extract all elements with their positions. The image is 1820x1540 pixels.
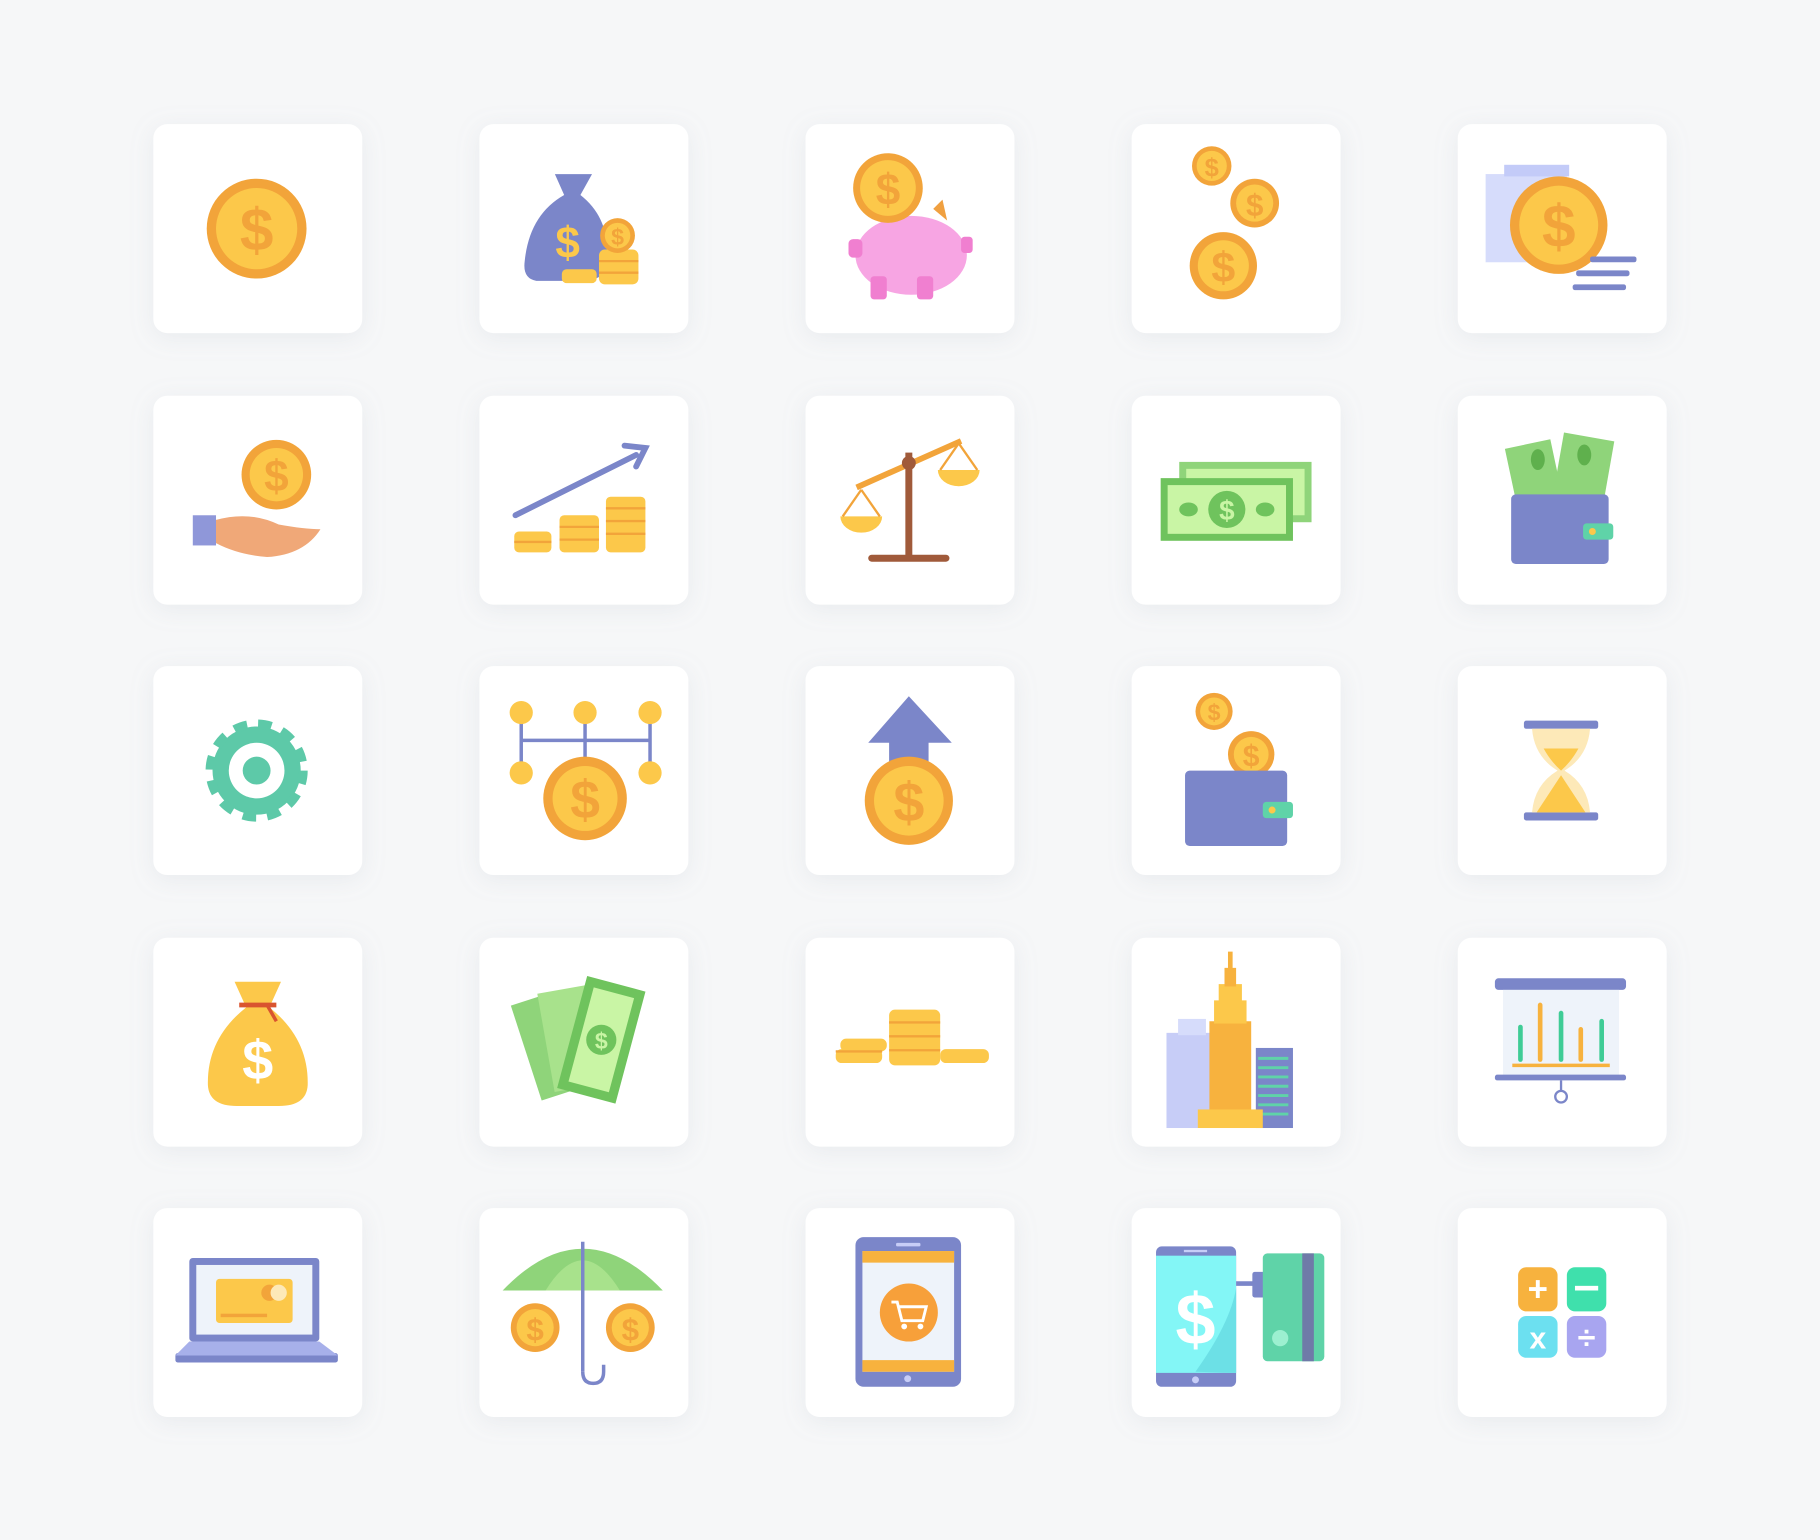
icon: piggy bank	[848, 153, 973, 299]
icon: fanned cash	[511, 976, 645, 1104]
icon: phone payment card	[1156, 1246, 1324, 1387]
icon: hand with coin: $	[264, 452, 289, 501]
icon: phone payment card: $	[1175, 1280, 1215, 1360]
icon: wallet with bills	[1505, 432, 1614, 564]
icon: calculator keys: ÷	[1578, 1320, 1596, 1356]
icon: wallet with coins: $	[1208, 700, 1221, 726]
icon: falling coins: $	[1246, 188, 1263, 223]
icon: coin	[207, 179, 307, 279]
icon: money bag with coins: $	[611, 224, 624, 250]
icon: falling coins: $	[1211, 244, 1235, 292]
icon: document with coin: $	[1542, 192, 1576, 260]
icon: umbrella with coins	[503, 1242, 663, 1383]
icon: money bag with coins: $	[555, 219, 580, 268]
icon: laptop with card	[175, 1258, 338, 1362]
icon: wallet with coins	[1185, 693, 1293, 846]
icon: coin stacks	[836, 1010, 989, 1065]
icon: balance scale	[840, 441, 980, 562]
icon: banknotes	[1161, 462, 1312, 541]
icon: coin network: $	[570, 771, 600, 830]
icon: banknotes: $	[1219, 495, 1235, 526]
icon: money sack: $	[242, 1029, 273, 1091]
icon: coin network	[510, 701, 662, 840]
icon: arrow up coin	[865, 696, 953, 845]
icon: growth chart coins	[514, 446, 645, 552]
icon: falling coins	[1190, 146, 1279, 299]
icon: calculator keys: x	[1529, 1323, 1546, 1356]
icon: hand with coin	[193, 440, 320, 557]
icon: gear	[213, 726, 301, 815]
card grid	[153, 124, 1667, 1417]
icon: calculator keys	[1518, 1267, 1606, 1358]
icon: calculator keys: +	[1528, 1270, 1548, 1309]
icon: money sack	[208, 982, 308, 1106]
icon: document with coin	[1486, 165, 1636, 290]
icon: umbrella with coins: $	[526, 1312, 544, 1347]
icon: wallet with coins: $	[1243, 740, 1260, 773]
icon: piggy bank: $	[876, 165, 900, 214]
icon: falling coins: $	[1205, 154, 1219, 182]
icon: arrow up coin: $	[893, 772, 924, 834]
icon: umbrella with coins: $	[622, 1312, 639, 1347]
icon: tablet shopping	[855, 1237, 961, 1387]
icon: presentation board chart	[1495, 978, 1626, 1102]
icon: city buildings	[1166, 952, 1293, 1128]
icon: coin: $	[240, 196, 273, 264]
icon: hourglass	[1524, 721, 1598, 820]
icon: fanned cash: $	[595, 1028, 608, 1054]
icon: money bag with coins	[524, 174, 638, 284]
